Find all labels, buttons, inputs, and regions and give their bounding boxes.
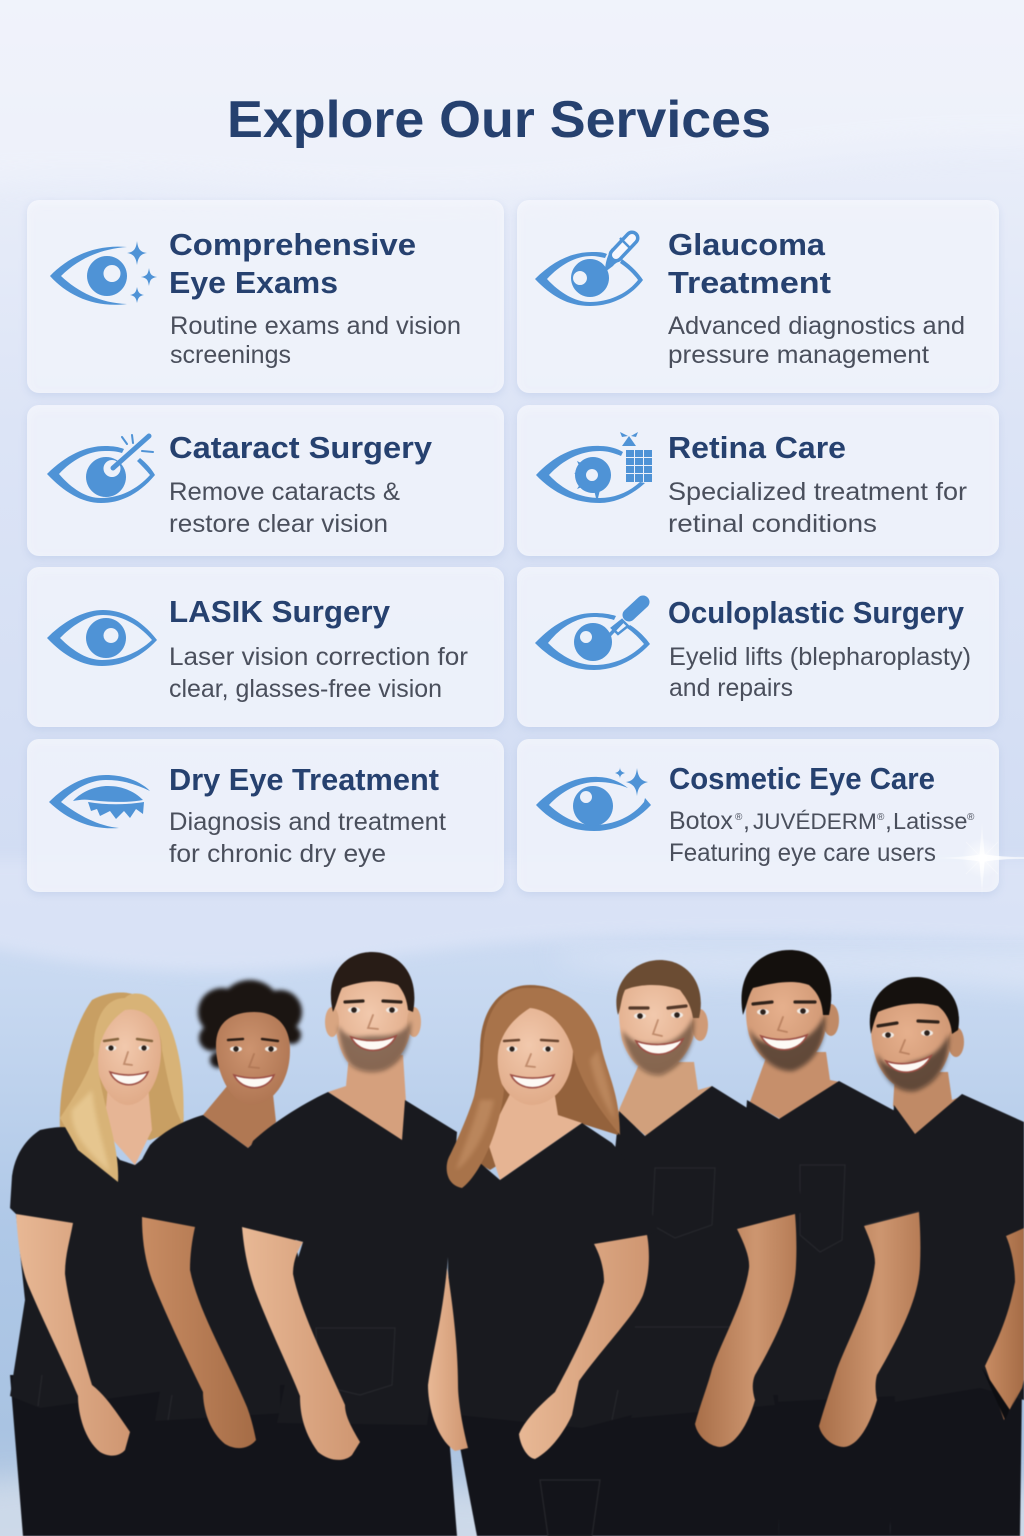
description line 2: screenings bbox=[170, 341, 291, 369]
heading: Cosmetic Eye Care bbox=[669, 761, 935, 796]
person 3: tall man, centre left bbox=[230, 952, 457, 1536]
lens flare bbox=[932, 818, 1024, 898]
person 7: man at far right bbox=[870, 977, 1024, 1536]
description: Advanced diagnostics and bbox=[668, 312, 965, 340]
description: Routine exams and vision bbox=[170, 312, 461, 340]
description: ® bbox=[735, 812, 743, 823]
description: Eyelid lifts (blepharoplasty) bbox=[669, 643, 971, 671]
person 4: woman with auburn hair, front bbox=[428, 985, 658, 1536]
heading: Retina Care bbox=[668, 430, 846, 465]
description line 2: pressure management bbox=[668, 341, 929, 369]
panel: retina care bbox=[517, 405, 999, 556]
description line 2: Featuring eye care users bbox=[669, 839, 936, 867]
title: Explore Our Services bbox=[227, 91, 771, 149]
heading: Cataract Surgery bbox=[169, 430, 433, 465]
description line 2: restore clear vision bbox=[169, 510, 388, 538]
heading line 2: Treatment bbox=[668, 265, 831, 300]
description line 2: retinal conditions bbox=[668, 510, 877, 538]
heading: LASIK Surgery bbox=[169, 594, 391, 629]
panel: comprehensive eye exams bbox=[27, 200, 504, 393]
description: Laser vision correction for bbox=[169, 643, 468, 671]
heading: Oculoplastic Surgery bbox=[668, 595, 965, 630]
team photo illustration bbox=[10, 950, 1024, 1536]
heading: Dry Eye Treatment bbox=[169, 762, 439, 797]
description line 2: for chronic dry eye bbox=[169, 840, 386, 868]
icon: closed dry eye bbox=[49, 775, 150, 828]
description: Botox bbox=[669, 807, 733, 835]
description line 2: and repairs bbox=[669, 674, 793, 702]
icon: eye with surgical tool bbox=[535, 602, 650, 670]
description: Remove cataracts & bbox=[169, 478, 400, 506]
description: Specialized treatment for bbox=[668, 478, 967, 506]
icon: eye with sparkles bbox=[536, 767, 651, 831]
description: , bbox=[743, 807, 750, 835]
description: Latisse bbox=[893, 808, 967, 834]
description: ® bbox=[967, 812, 975, 823]
heading line 2: Eye Exams bbox=[169, 265, 338, 300]
person 6: man, second from right bbox=[735, 950, 928, 1536]
icon: eye with sparkles bbox=[50, 241, 157, 305]
person 2: woman with curly dark hair bbox=[127, 980, 305, 1536]
description line 2: clear, glasses-free vision bbox=[169, 675, 442, 703]
panel: glaucoma treatment bbox=[517, 200, 999, 393]
panel: cosmetic eye care bbox=[517, 739, 999, 892]
person 1: blonde woman bbox=[10, 993, 185, 1536]
heading: Glaucoma bbox=[668, 227, 826, 262]
icon: eye with dropper bbox=[535, 238, 643, 306]
icon: eye with laser bbox=[47, 435, 155, 503]
panel: cataract surgery bbox=[27, 405, 504, 556]
description: Diagnosis and treatment bbox=[169, 808, 446, 836]
person 5: man, third from right bbox=[598, 960, 804, 1536]
panel: dry eye treatment bbox=[27, 739, 504, 892]
panel: lasik surgery bbox=[27, 567, 504, 727]
description: , bbox=[885, 807, 892, 835]
panel: oculoplastic surgery bbox=[517, 567, 999, 727]
description: JUVÉDERM bbox=[753, 809, 877, 834]
icon: eye with retina grid bbox=[536, 432, 652, 503]
description: ® bbox=[877, 812, 885, 823]
icon: open eye bbox=[47, 610, 157, 666]
heading: Comprehensive bbox=[169, 227, 416, 262]
